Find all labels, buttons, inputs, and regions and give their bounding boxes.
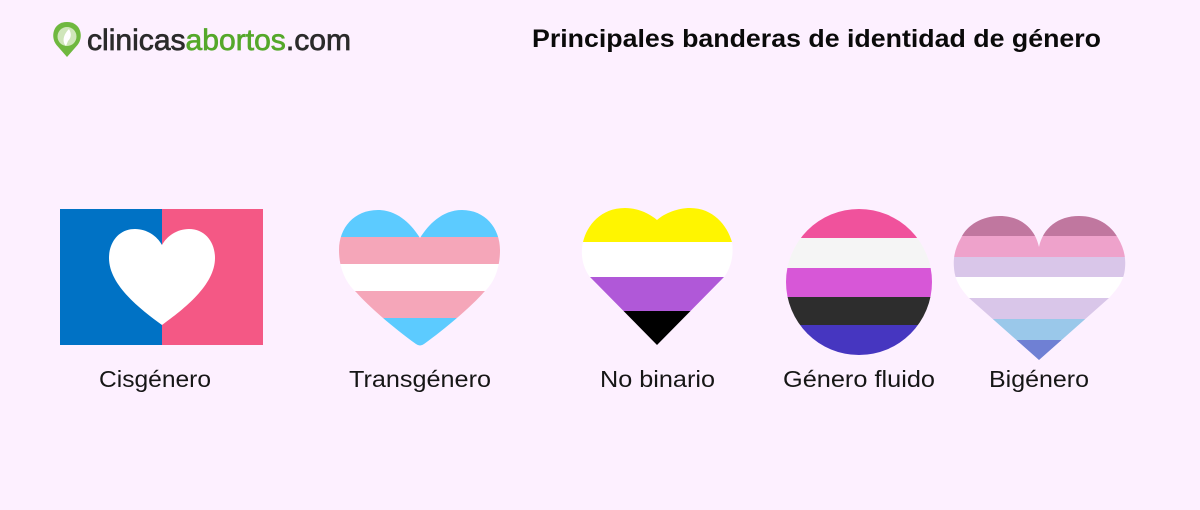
title: Principales banderas de identidad de género: [532, 25, 1101, 53]
flag: transgénero: [339, 210, 500, 346]
flag: cisgénero: [60, 209, 263, 345]
label: no binario: No binario: [600, 366, 715, 392]
flag: no binario: [578, 205, 738, 347]
icon: map pin: [53, 22, 81, 57]
label: transgénero: Transgénero: [349, 366, 491, 392]
logo wordmark: clinicasabortos.com: [87, 24, 351, 57]
flag: género fluido: [786, 209, 932, 355]
label: género fluido: Género fluido: [783, 366, 935, 392]
label: bigénero: Bigénero: [989, 366, 1089, 392]
logo: clinicasabortos.com: [53, 22, 351, 57]
label: cisgénero: Cisgénero: [99, 366, 211, 392]
flag: bigénero: [950, 212, 1130, 362]
